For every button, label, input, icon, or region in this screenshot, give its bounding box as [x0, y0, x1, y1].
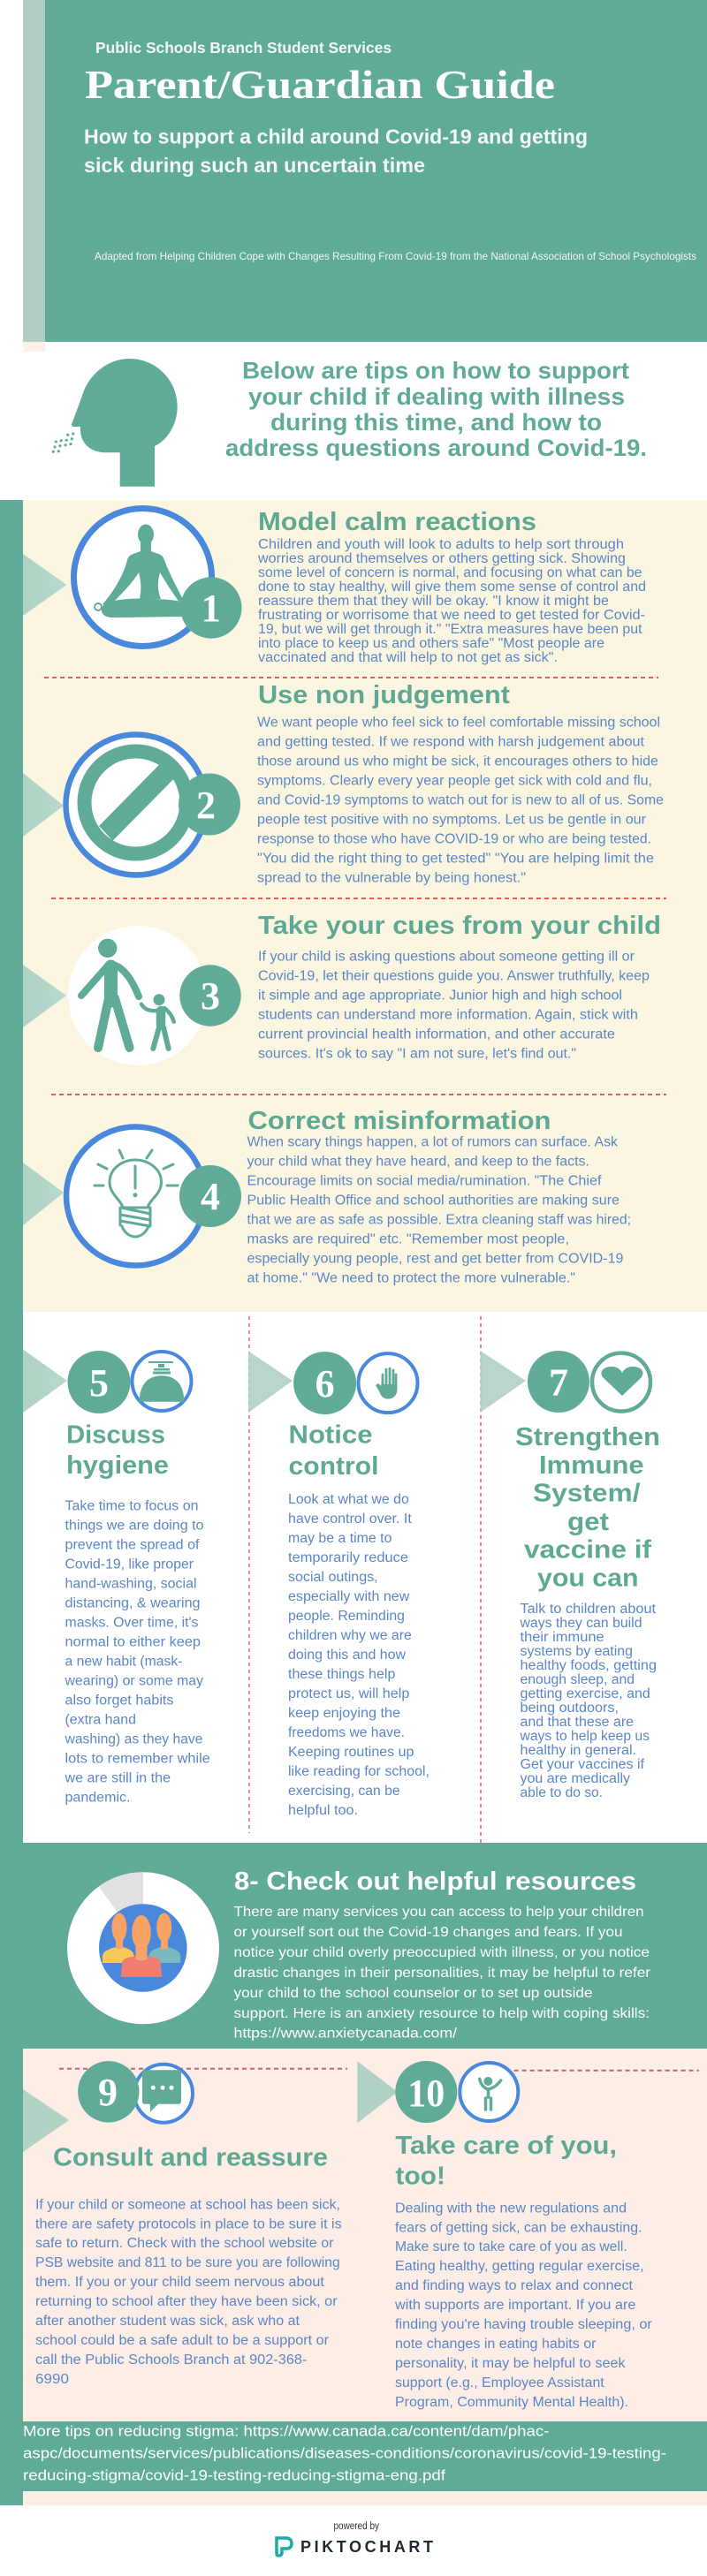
body text: (extra hand: [65, 1712, 136, 1727]
icon: prohibited sign: [85, 751, 187, 853]
body text: these things help: [288, 1667, 395, 1682]
icon: meditating figure: [95, 525, 190, 617]
body text: with supports are important. If you are: [394, 2298, 635, 2313]
body text: PSB website and 811 to be sure you are following: [35, 2255, 340, 2270]
footer logo: [277, 2521, 433, 2556]
body text: students can understand more information. Again, stick with: [258, 1007, 638, 1022]
body text: some level of concern is normal, and focusing on what can be: [258, 565, 642, 580]
body text: fears of getting sick, can be exhausting.: [395, 2220, 642, 2235]
number 4: 4: [201, 1175, 220, 1218]
body text: people test positive with no symptoms. Let us be gentle in our: [257, 812, 646, 827]
body text: them. If you or your child seem nervous about: [35, 2275, 325, 2290]
number 4: [179, 1165, 241, 1227]
body text: distancing, & wearing: [65, 1595, 200, 1610]
body text: worries around themselves or others getting sick. Showing: [257, 551, 626, 566]
body text: protect us, will help: [288, 1686, 409, 1701]
body text: [519, 1602, 657, 1800]
body text: school could be a safe adult to be a support or: [35, 2333, 329, 2348]
heading: control: [288, 1452, 378, 1481]
heading: Discuss: [66, 1421, 165, 1449]
tip 4: correct misinformation: [23, 1107, 631, 1285]
panel: tip 8 helpful resources: [0, 1843, 707, 2049]
body text: healthy in general.: [520, 1743, 636, 1758]
body text: hand-washing, social: [65, 1576, 196, 1591]
number 1: [180, 577, 242, 639]
panel: tips 9 and 10: [23, 2049, 707, 2505]
body text: Get your vaccines if: [520, 1757, 645, 1772]
heading: Correct misinformation: [247, 1107, 551, 1135]
icon: head sneezing: [52, 359, 178, 487]
tip 10: take care of you: [357, 2061, 652, 2410]
body text: vaccinated and that will help to not get as sick".: [258, 650, 558, 665]
body text: masks are required" etc. "Remember most people,: [247, 1231, 569, 1246]
number 1: 1: [201, 587, 221, 630]
tip 3: take your cues: [23, 912, 661, 1065]
left green strip: [0, 500, 23, 2505]
icon: light bulb: [95, 1150, 178, 1237]
heading: Notice: [288, 1421, 373, 1449]
body text: ways to help keep us: [519, 1729, 650, 1744]
body text: healthy foods, getting: [520, 1658, 657, 1673]
icon: soap dispenser: [133, 1352, 191, 1411]
body text: getting exercise, and: [520, 1686, 650, 1701]
body text: [257, 715, 664, 885]
body text: Look at what we do: [288, 1492, 409, 1507]
body text: that we are as safe as possible. Extra cleaning staff was hired;: [247, 1212, 631, 1227]
number 5: 5: [89, 1361, 109, 1405]
number 9: [78, 2061, 140, 2122]
body text: have control over. It: [288, 1512, 413, 1527]
body text: done to stay healthy, will give them some sense of control and: [258, 580, 646, 595]
subtitle: sick during such an uncertain time: [84, 154, 425, 177]
body text: and finding ways to relax and connect: [395, 2278, 634, 2293]
body text: notice your child overly preoccupied with illness, or you notice: [233, 1945, 650, 1960]
body text: "You did the right thing to get tested" "You are helping limit the: [257, 851, 654, 866]
body text: We want people who feel sick to feel comfortable missing school: [257, 715, 660, 730]
body text: [257, 537, 646, 665]
subtitle: How to support a child around Covid-19 and getting: [84, 125, 588, 148]
panel: tips 1 to 4: [23, 500, 707, 1312]
body text: those around us who might be sick, it encourages others to hide: [257, 754, 658, 769]
body text: Take time to focus on: [65, 1498, 198, 1513]
body text: pandemic.: [65, 1790, 131, 1805]
body text: reassure them that they will be okay. "I know it might be: [258, 594, 609, 609]
body text: When scary things happen, a lot of rumors can surface. Ask: [247, 1134, 618, 1149]
body text: Keeping routines up: [288, 1745, 414, 1760]
body text: lots to remember while: [65, 1751, 210, 1766]
heading: Strengthen: [515, 1423, 660, 1451]
body text: people. Reminding: [288, 1609, 405, 1624]
organisation name: Public Schools Branch Student Services: [95, 39, 392, 57]
body text: [233, 1905, 650, 2042]
body text: Make sure to take care of you as well.: [395, 2239, 627, 2254]
body text: If your child or someone at school has been sick,: [35, 2198, 340, 2213]
title: Parent/Guardian Guide: [85, 63, 555, 107]
heading: Model calm reactions: [258, 508, 536, 536]
header panel: [23, 0, 707, 352]
body text: enough sleep, and: [520, 1672, 635, 1687]
body text: Dealing with the new regulations and: [395, 2201, 627, 2216]
body text: https://www.anxietycanada.com/: [233, 2027, 458, 2042]
intro heading: address questions around Covid-19.: [225, 435, 647, 461]
body text: washing) as they have: [64, 1731, 203, 1746]
number 10: [395, 2061, 457, 2123]
body text: your child to the school counselor or to set up outside: [233, 1986, 593, 2001]
body text: [35, 2198, 342, 2387]
heading: Use non judgement: [258, 681, 510, 709]
heading: hygiene: [66, 1451, 169, 1480]
body text: [394, 2201, 652, 2410]
body text: it simple and age appropriate. Junior high and high school: [258, 988, 622, 1003]
body text: social outings,: [288, 1570, 378, 1585]
body text: there are safety protocols in place to be sure it is: [35, 2217, 342, 2232]
body text: children why we are: [288, 1628, 412, 1643]
body text: systems by eating: [520, 1644, 633, 1659]
intro heading: Below are tips on how to support: [242, 357, 629, 383]
body text: may be a time to: [288, 1531, 392, 1546]
icon: chat bubble: [134, 2065, 193, 2123]
number 6: 6: [315, 1362, 335, 1405]
body text: masks. Over time, it's: [65, 1615, 199, 1630]
icon: person with raised arms: [460, 2063, 518, 2121]
tip 1: model calm reactions: [23, 508, 646, 665]
number 6: [293, 1352, 356, 1414]
body text: Talk to children about: [520, 1602, 657, 1617]
body text: exercising, can be: [288, 1784, 400, 1799]
number 10: 10: [407, 2072, 445, 2115]
body text: ways they can build: [519, 1616, 642, 1631]
body text: Encourage limits on social media/rumination. "The Chief: [247, 1173, 602, 1188]
body text: a new habit (mask-: [65, 1654, 182, 1669]
body text: response to those who have COVID-19 or who are being tested.: [257, 831, 651, 846]
body text: able to do so.: [520, 1785, 603, 1800]
body text: and getting tested. If we respond with harsh judgement about: [257, 734, 645, 749]
number 2: [179, 774, 240, 836]
body text: normal to either keep: [65, 1634, 201, 1649]
icon: raised hand: [359, 1353, 417, 1413]
body text: especially young people, rest and get better from COVID-19: [247, 1251, 624, 1266]
body text: keep enjoying the: [288, 1706, 400, 1721]
body text: and that these are: [520, 1715, 634, 1730]
body text: or yourself sort out the Covid-19 changes and fears. If you: [233, 1925, 622, 1940]
tip 9: consult and reassure: [23, 2061, 342, 2387]
panel: tip 5 discuss hygiene: [23, 1350, 210, 1805]
heading: 8- Check out helpful resources: [234, 1868, 636, 1896]
body text: Covid-19, let their questions guide you. Answer truthfully, keep: [258, 968, 650, 983]
body text: [258, 949, 650, 1061]
body text: support (e.g., Employee Assistant: [395, 2375, 604, 2390]
body text: we are still in the: [64, 1770, 171, 1785]
body text: finding you're having trouble sleeping, or: [395, 2317, 652, 2332]
heading: you can: [537, 1564, 638, 1592]
heading: Immune: [539, 1451, 644, 1480]
body text: note changes in eating habits or: [395, 2337, 596, 2352]
number 2: 2: [196, 784, 216, 827]
body text: freedoms we have.: [288, 1725, 405, 1740]
body text: If your child is asking questions about someone getting ill or: [258, 949, 635, 964]
body text: and Covid-19 symptoms to watch out for is new to all of us. Some: [257, 792, 664, 807]
icon: adult and child: [81, 939, 174, 1049]
body text: at home." "We need to protect the more vulnerable.": [247, 1270, 575, 1285]
icon: group of people in donut: [67, 1872, 219, 2024]
heading: [515, 1423, 660, 1592]
body text: spread to the vulnerable by being honest.": [257, 870, 526, 885]
heading: Take care of you,: [395, 2132, 617, 2160]
heading: System/: [533, 1479, 640, 1507]
body text: Covid-19, like proper: [65, 1557, 194, 1572]
footer logo: PIKTOCHART: [300, 2538, 433, 2556]
body text: [288, 1492, 430, 1818]
attribution: Adapted from Helping Children Cope with Changes Resulting From Covid-19 from the National Association of School Psychologists: [95, 250, 696, 262]
heading: get: [567, 1508, 609, 1536]
body text: like reading for school,: [288, 1764, 430, 1779]
body text: temporarily reduce: [288, 1550, 408, 1565]
intro heading: during this time, and how to: [270, 409, 602, 436]
body text: wearing) or some may: [64, 1673, 203, 1688]
body text: into place to keep us and others safe" "Most people are: [258, 636, 604, 651]
icon: heart: [592, 1353, 650, 1412]
body text: 6990: [35, 2372, 69, 2387]
body text: safe to return. Check with the school website or: [35, 2236, 334, 2251]
body text: current provincial health information, and other accurate: [258, 1027, 615, 1042]
number 9: 9: [98, 2071, 118, 2114]
body text: especially with new: [288, 1589, 410, 1604]
body text: being outdoors,: [520, 1701, 619, 1716]
number 7: [528, 1351, 589, 1413]
body text: support. Here is an anxiety resource to help with coping skills:: [233, 2006, 650, 2021]
body text: their immune: [520, 1630, 604, 1645]
heading: Consult and reassure: [53, 2144, 328, 2172]
body text: [247, 1134, 631, 1285]
body text: sources. It's ok to say "I am not sure, let's find out.": [258, 1046, 576, 1061]
body text: your child what they have heard, and keep to the facts.: [247, 1154, 589, 1169]
body text: Eating healthy, getting regular exercise,: [395, 2259, 644, 2274]
body text: also forget habits: [65, 1693, 174, 1708]
heading: Take your cues from your child: [258, 912, 661, 940]
stigma link band: More tips on reducing stigma: https://www.canada.ca/content/dam/phac-: [23, 2422, 549, 2440]
body text: prevent the spread of: [65, 1537, 200, 1552]
body text: personality, it may be helpful to seek: [395, 2356, 626, 2371]
body text: Public Health Office and school authorities are making sure: [247, 1193, 620, 1208]
stigma link band: aspc/documents/services/publications/diseases-conditions/coronavirus/covid-19-testing-: [23, 2445, 666, 2461]
panel: tip 7 strengthen immune system: [481, 1351, 660, 1800]
heading: [395, 2132, 617, 2191]
icon: logo mark: [277, 2538, 292, 2556]
body text: you are medically: [520, 1771, 630, 1786]
body text: doing this and how: [288, 1648, 407, 1663]
body text: Children and youth will look to adults to help sort through: [258, 537, 624, 552]
heading: too!: [395, 2163, 445, 2191]
subtitle: [84, 125, 588, 177]
number 3: 3: [201, 974, 220, 1018]
heading: [66, 1421, 169, 1480]
body text: Program, Community Mental Health).: [395, 2395, 628, 2410]
stigma link band: reducing-stigma/covid-19-testing-reducing-stigma-eng.pdf: [23, 2466, 445, 2484]
heading: [288, 1421, 378, 1481]
number 7: 7: [549, 1360, 568, 1405]
body text: call the Public Schools Branch at 902-368-: [35, 2352, 307, 2368]
body text: [64, 1498, 210, 1805]
tip 2: use non judgement: [23, 681, 664, 885]
body text: drastic changes in their personalities, it may be helpful to refer: [233, 1966, 650, 1981]
intro heading: your child if dealing with illness: [248, 383, 625, 410]
body text: frustrating or worrisome that we need to get tested for Covid-: [258, 608, 645, 623]
body text: things we are doing to: [65, 1518, 203, 1533]
body text: 19, but we will get through it." "Extra measures have been put: [258, 622, 642, 637]
number 5: [67, 1351, 131, 1413]
intro heading: [225, 357, 647, 461]
footer logo: powered by: [334, 2521, 379, 2532]
number 3: [179, 965, 241, 1027]
body text: symptoms. Clearly every year people get sick with cold and flu,: [257, 773, 652, 788]
body text: helpful too.: [288, 1803, 358, 1818]
panel: tip 6 notice control: [248, 1351, 430, 1818]
body text: after another student was sick, ask who at: [35, 2314, 300, 2329]
body text: There are many services you can access to help your children: [233, 1905, 643, 1920]
stigma link band: [23, 2421, 707, 2491]
heading: vaccine if: [524, 1535, 651, 1564]
body text: returning to school after they have been sick, or: [35, 2294, 338, 2309]
